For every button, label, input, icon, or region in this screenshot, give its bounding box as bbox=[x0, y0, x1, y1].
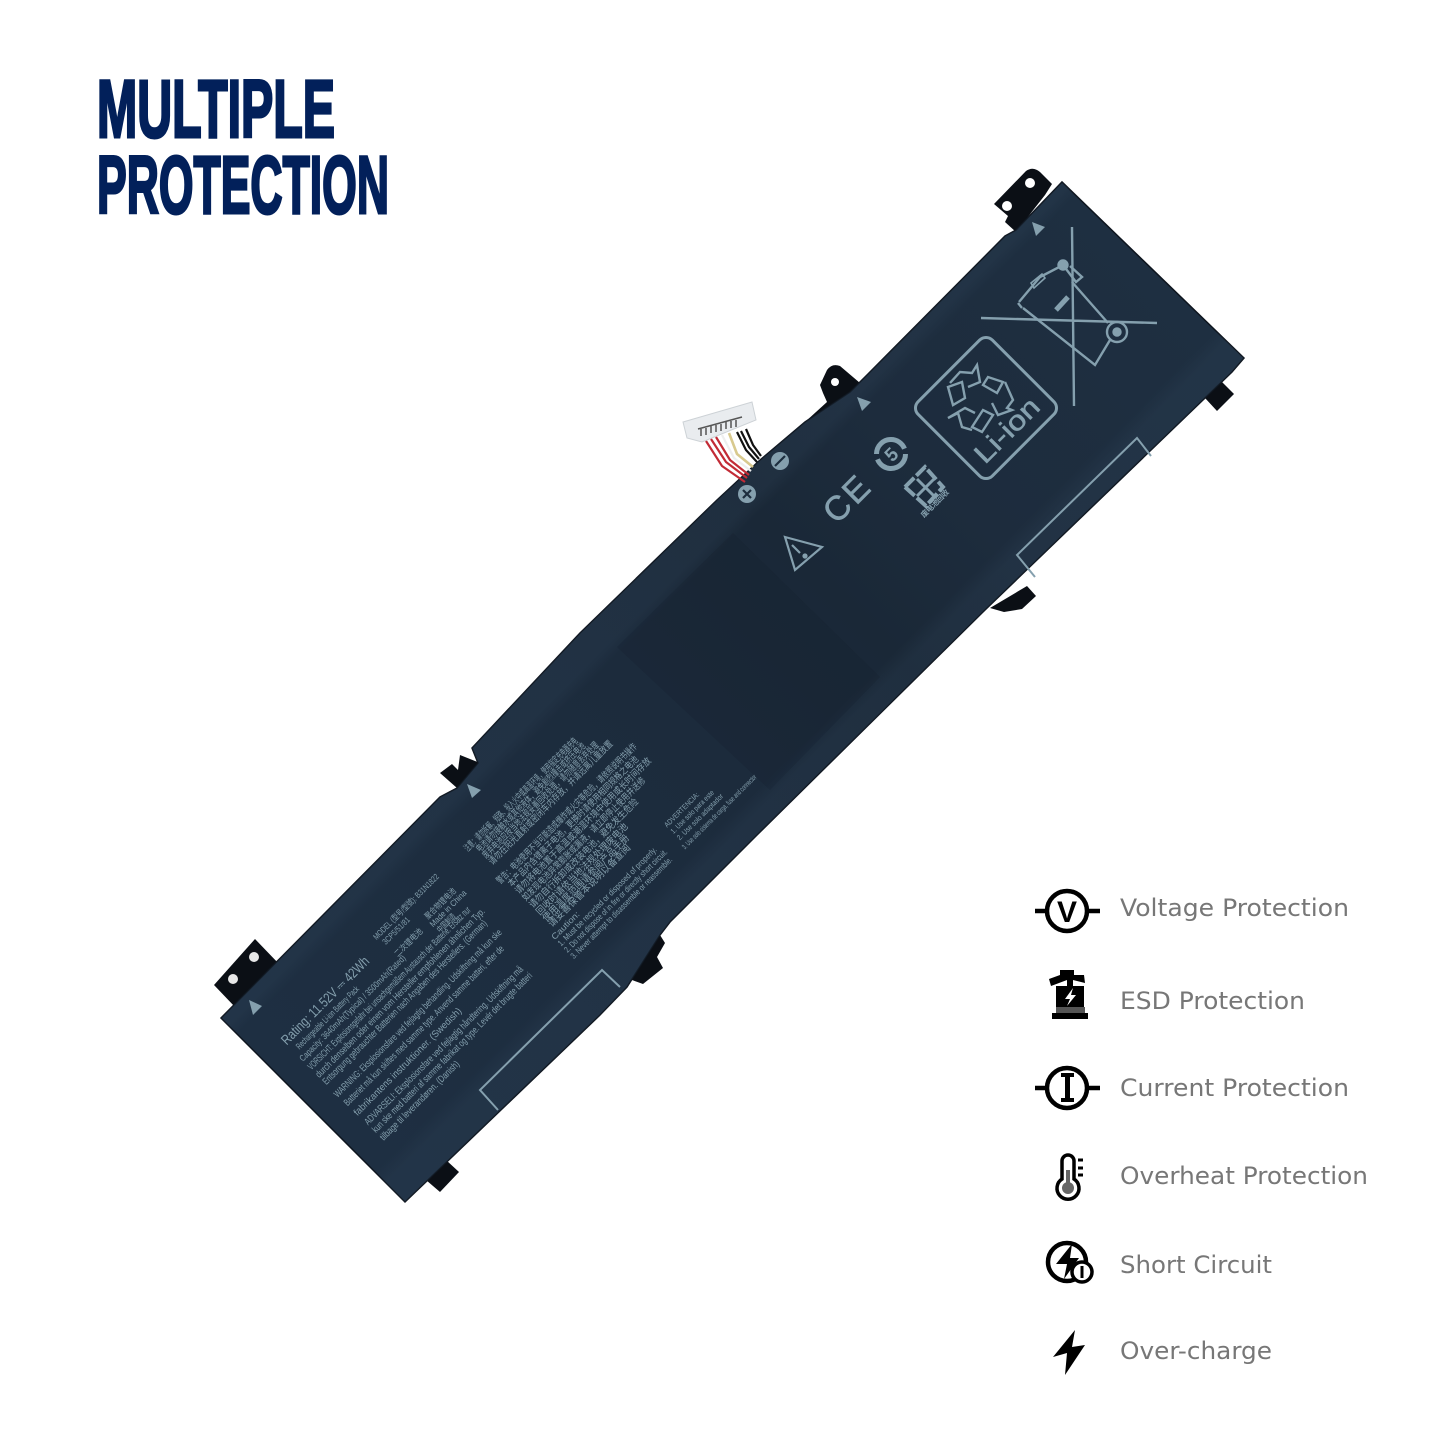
markings bbox=[480, 227, 1157, 1110]
warnings: kun ske med batteri af samme fabrikat og type. Levér det brugte batteri bbox=[370, 971, 535, 1135]
recycling mark: 废电池回收 bbox=[918, 487, 952, 520]
icon: voltage bbox=[1035, 891, 1100, 931]
recycling mark bbox=[905, 467, 952, 520]
label frame upper bbox=[1017, 438, 1151, 577]
advertencia bbox=[660, 753, 759, 851]
title bbox=[97, 64, 389, 231]
title: PROTECTION bbox=[97, 140, 389, 231]
warnings: fabrikantens instruktioner. (Swedish) bbox=[352, 1006, 464, 1118]
warnings: tilbage til leverandøren. (Danish) bbox=[378, 1059, 462, 1143]
cycle 5 icon: 5 bbox=[881, 444, 904, 466]
label: overheat protection: Overheat Protection bbox=[1120, 1162, 1368, 1190]
title: MULTIPLE bbox=[97, 64, 335, 155]
battery body bbox=[221, 182, 1244, 1202]
caution english: 1. Must be recycled or disposed of properly. bbox=[555, 845, 659, 948]
model lines: 中国制造 bbox=[435, 911, 458, 935]
caution english: 2. Do not dispose of in fire or directly short circuit. bbox=[562, 847, 669, 954]
compliance text in Chinese: 如发现电池异常膨胀或漏液，请立即停止使用并送修 bbox=[519, 774, 648, 903]
rating lines: Rating: 11.52V ⎓ 42Wh bbox=[278, 953, 372, 1048]
compliance text in Chinese: 电池请勿接触水或其他液体，避免剧烈撞击或挤压电池 bbox=[473, 740, 588, 855]
advertencia: ADVERTENCIA: bbox=[662, 790, 701, 829]
compliance text in Chinese bbox=[461, 708, 687, 934]
warnings: VORSICHT: Explosionsgefahr bei unsachgemäßem Austausch der Batterie. Ersatz nur bbox=[306, 905, 474, 1072]
warnings: ADVARSELI: Eksplosionsfare ved fejlagtig håndtering. Udskiftning må bbox=[362, 964, 526, 1128]
label: ESD protection: ESD Protection bbox=[1120, 987, 1305, 1015]
Li-ion recycle badge: Li-ion bbox=[968, 391, 1046, 469]
label: current protection: Current Protection bbox=[1120, 1074, 1349, 1102]
mounting tab: top bbox=[994, 169, 1052, 232]
compliance text in Chinese: 回收时请依当地法规处理废电池 bbox=[534, 820, 631, 918]
advertencia: 1. Use solo para este bbox=[669, 788, 716, 836]
rating lines: Rechargeable Li-ion Battery Pack bbox=[294, 984, 361, 1051]
compliance text in Chinese: 废弃电池应按当地法规妥善回收处理，请勿随意丢弃处理 bbox=[480, 739, 602, 861]
crossed bin icon bbox=[1018, 260, 1127, 365]
model lines bbox=[371, 866, 475, 970]
plus terminal bbox=[738, 485, 756, 503]
battery bbox=[214, 169, 1244, 1202]
cycle 5 icon bbox=[876, 440, 906, 468]
edge sheen bbox=[221, 182, 1244, 1202]
alignment arrows bbox=[249, 222, 1045, 1015]
compliance text in Chinese: 警告：电池使用不当可能造成爆炸或火灾等危险，请依照说明书操作 bbox=[494, 741, 640, 886]
darker center panel bbox=[617, 533, 880, 790]
caution english: Caution: bbox=[549, 909, 582, 942]
caution english: 3. Never attempt to disassemble or reassemble. bbox=[568, 855, 674, 961]
white connector bbox=[683, 402, 756, 442]
battery label text bbox=[273, 663, 759, 1149]
icon: thermometer bbox=[1057, 1155, 1083, 1199]
cross out lines bbox=[981, 227, 1157, 406]
warnings: Batteriet må kun skiftes med samme type. Anvend samme batteri, efter de bbox=[342, 943, 507, 1109]
compliance text in Chinese: 使用温度范围请参阅产品手册 bbox=[540, 832, 632, 924]
label frame lower bbox=[480, 970, 620, 1110]
warning triangle bbox=[785, 537, 822, 570]
warnings: durch denselben oder einen vom Hersteller empfohlenen ähnlichen Typ. bbox=[314, 906, 488, 1080]
CE mark: CE bbox=[816, 469, 878, 531]
model lines: 3CP5/51/81 bbox=[380, 915, 412, 947]
icon: voltage: V bbox=[1057, 896, 1077, 929]
advertencia: 2. Use solo adaptador bbox=[675, 791, 725, 842]
model lines: 聚合物锂电池 bbox=[423, 886, 458, 921]
compliance text in Chinese: 请妥善保管本说明以备查阅 bbox=[546, 842, 633, 930]
model lines: 二次锂电池 bbox=[392, 926, 425, 959]
label: short circuit: Short Circuit bbox=[1120, 1251, 1272, 1279]
label: over-charge: Over-charge bbox=[1120, 1337, 1272, 1365]
compliance text in Chinese: 请勿自行拆卸或改装电池，避免发生危险 bbox=[526, 796, 641, 911]
mounting tab: middle bbox=[805, 365, 860, 433]
Li-ion recycle badge bbox=[912, 334, 1060, 482]
icon: short circuit bbox=[1048, 1243, 1092, 1282]
model lines: MODEL (型号/型號): B31N1822 bbox=[371, 871, 441, 942]
icon: current bbox=[1035, 1068, 1100, 1108]
minus terminal bbox=[771, 452, 789, 470]
legend bbox=[1035, 891, 1368, 1375]
connector wires bbox=[706, 429, 761, 482]
rating lines: Capacity: 3640mAh(Typical) / 3500mAh(Rated) bbox=[297, 953, 408, 1063]
compliance text in Chinese: 请勿在阳光直射或密闭车内存放，并请远离儿童放置 bbox=[486, 738, 616, 867]
label: voltage protection: Voltage Protection bbox=[1120, 894, 1349, 922]
icon: ESD bbox=[1049, 970, 1088, 1019]
warnings: Entsorgung gebrauchter Batterien nach Angaben des Herstellers. (German) bbox=[321, 918, 490, 1087]
compliance text in Chinese: 本产品内含锂离子电池，更换时请使用相同规格之电池 bbox=[505, 753, 641, 889]
advertencia: 3. Use solo sistema de carga, fuse and connector bbox=[680, 772, 759, 851]
icon: over-charge bolt bbox=[1053, 1330, 1085, 1375]
warnings bbox=[305, 898, 551, 1145]
warnings: WARNING: Eksplosionsfare ved fejlagtig behandling. Udskiftning må kun ske bbox=[332, 927, 505, 1100]
model lines: Made in China bbox=[427, 888, 469, 929]
mounting tab: bottom left bbox=[214, 939, 280, 1007]
compliance text in Chinese: 注意：请勿拆解、短路、投入火中或高温环境，使用指定充电器充电 bbox=[461, 735, 580, 854]
side clips bbox=[426, 382, 1234, 1192]
compliance text in Chinese: 请勿将电池置于高温或潮湿环境中使用或长时间存放 bbox=[512, 755, 654, 896]
mounting tab: lower middle bbox=[440, 755, 480, 788]
